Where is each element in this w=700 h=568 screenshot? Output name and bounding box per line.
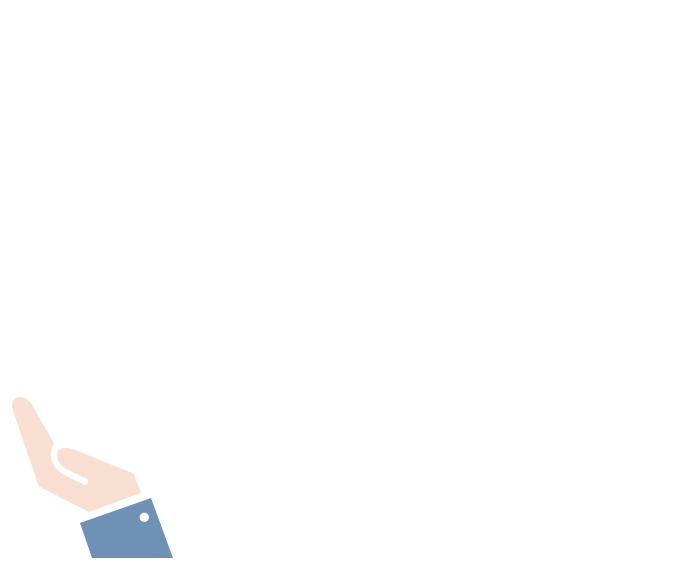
hand (12, 397, 141, 512)
sleeve (80, 498, 173, 558)
icon: open hand with sleeve (12, 397, 173, 558)
cuff button (140, 513, 149, 522)
